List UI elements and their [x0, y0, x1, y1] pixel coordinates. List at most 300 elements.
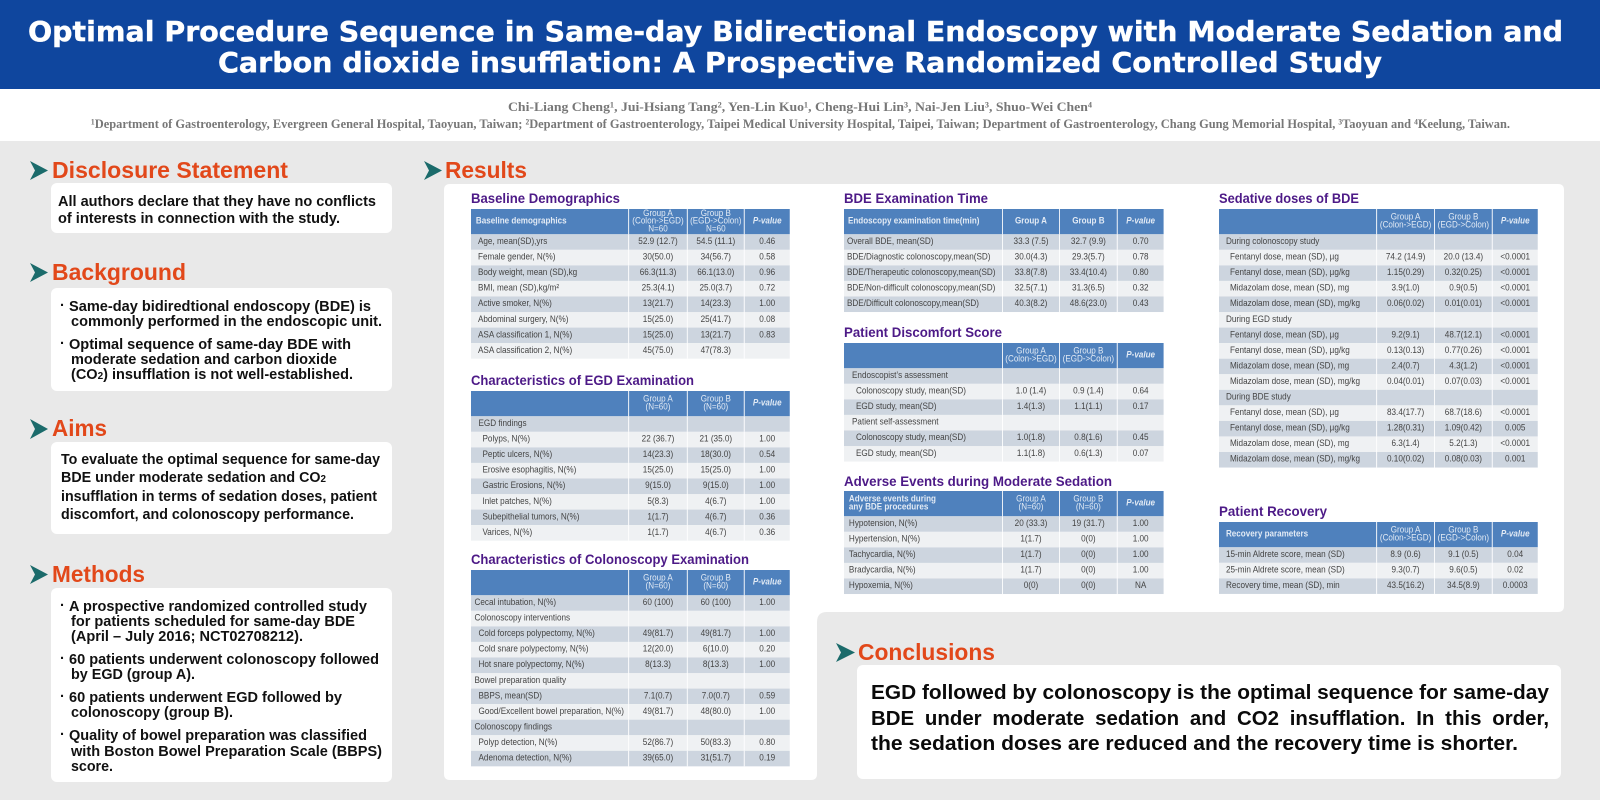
table: patient discomfort score: EGD study, mean(SD): [856, 448, 937, 459]
table: sedative doses: During colonoscopy study: [1226, 236, 1319, 247]
panel: conclusions: Conclusions: [858, 639, 995, 665]
table: baseline demographics: ASA classification 2, N(%): [478, 345, 572, 356]
table: patient discomfort score: Patient self-assessment: [852, 417, 939, 428]
table: patient discomfort score: 1.1(1.8): [1017, 448, 1045, 459]
table: EGD examination: 15(25.0): [701, 465, 731, 476]
panel: background: ·: [60, 298, 65, 314]
panel: aims: Aims: [52, 415, 107, 441]
panel: background: Background: [52, 259, 186, 285]
table: sedative doses: 0.07(0.03): [1445, 376, 1482, 387]
table: sedative doses: Fentanyl dose, mean (SD), µg/kg: [1230, 268, 1350, 278]
panel: methods: ·: [60, 651, 65, 667]
table: colonoscopy examination: 7.1(0.7): [644, 691, 672, 701]
table: colonoscopy examination: 7.0(0.7): [702, 691, 730, 701]
table: sedative doses: 0.001: [1505, 454, 1525, 465]
table: baseline demographics: Body weight, mean (SD),kg: [478, 268, 577, 278]
table: adverse events: 1.00: [1133, 550, 1149, 560]
table: adverse events: Hypotension, N(%): [849, 518, 917, 529]
table: colonoscopy examination: Cold snare polypectomy, N(%): [478, 644, 588, 655]
table: patient discomfort score: 0.8(1.6): [1074, 433, 1102, 443]
table: sedative doses: 1.28(0.31): [1387, 423, 1424, 434]
table: patient recovery: Recovery time, mean (SD), min: [1226, 581, 1340, 591]
table: BDE examination time: [844, 209, 1164, 312]
table: colonoscopy examination: 0.59: [759, 691, 775, 701]
table: baseline demographics: 0.72: [759, 283, 775, 294]
table: EGD examination: Group B: [701, 394, 731, 404]
panel: baseline demographics: [471, 190, 790, 358]
table: patient discomfort score: Group A: [1016, 346, 1046, 356]
table: colonoscopy examination: [471, 570, 790, 766]
table: sedative doses: Fentanyl dose, mean (SD), µg/kg: [1230, 345, 1350, 356]
table: adverse events: 0(0): [1081, 534, 1096, 545]
table: baseline demographics: 0.96: [759, 268, 775, 278]
table: baseline demographics: Age, mean(SD),yrs: [478, 236, 547, 247]
table: sedative doses: Fentanyl dose, mean (SD), µg: [1230, 407, 1339, 418]
table: colonoscopy examination: Colonoscopy findings: [474, 722, 552, 733]
heading: adverse events: Adverse Events during Moderate Sedation: [844, 473, 1112, 489]
table: sedative doses: <0.0001: [1500, 439, 1530, 449]
table: BDE examination time: BDE/Therapeutic colonoscopy,mean(SD): [847, 268, 995, 278]
table: sedative doses: 0.77(0.26): [1445, 345, 1482, 356]
table: baseline demographics: 14(23.3): [701, 299, 731, 309]
table: patient recovery: 0.0003: [1503, 581, 1528, 591]
table: sedative doses: 1.15(0.29): [1387, 268, 1424, 278]
panel: aims: [30, 415, 392, 534]
table: sedative doses: Midazolam dose, mean (SD), mg/kg: [1230, 376, 1360, 387]
table: patient recovery: [1219, 522, 1538, 594]
table: sedative doses: 20.0 (13.4): [1444, 252, 1483, 263]
panel: conclusions: the sedation doses are reduced and the recovery time is shorter.: [871, 733, 1518, 755]
table: adverse events: Tachycardia, N(%): [849, 550, 916, 560]
table: patient discomfort score: EGD study, mean(SD): [856, 402, 937, 412]
table: sedative doses: 3.9(1.0): [1392, 283, 1420, 294]
table: adverse events: Group A: [1016, 494, 1046, 504]
header band with title: [0, 0, 1600, 89]
table: colonoscopy examination: 0.80: [759, 737, 775, 748]
table: adverse events: Bradycardia, N(%): [849, 565, 916, 576]
panel: disclosure statement: Disclosure Statement: [52, 157, 288, 183]
table: patient discomfort score: Colonoscopy study, mean(SD): [856, 386, 966, 397]
table: colonoscopy examination: Good/Excellent bowel preparation, N(%): [478, 706, 624, 717]
table: colonoscopy examination: Adenoma detection, N(%): [478, 753, 572, 764]
table: adverse events: 0(0): [1081, 550, 1096, 560]
table: EGD examination: 1.00: [759, 496, 775, 507]
table: patient recovery: 0.02: [1507, 565, 1523, 576]
table: BDE examination time: 0.78: [1133, 252, 1149, 263]
table: adverse events: Hypoxemia, N(%): [849, 581, 913, 591]
table: sedative doses: <0.0001: [1500, 361, 1530, 372]
table: adverse events: 1.00: [1133, 565, 1149, 576]
table: colonoscopy examination: Bowel preparation quality: [474, 675, 566, 686]
table: sedative doses: 48.7(12.1): [1445, 330, 1482, 340]
table: colonoscopy examination: 39(65.0): [643, 753, 673, 764]
table: sedative doses: 4.3(1.2): [1449, 361, 1477, 372]
table: BDE examination time: 0.32: [1133, 283, 1149, 294]
table: baseline demographics: 54.5 (11.1): [696, 236, 735, 247]
table: EGD examination: 15(25.0): [643, 465, 673, 476]
table: BDE examination time: 33.8(7.8): [1015, 268, 1047, 278]
panel: characteristics of colonoscopy examination: [471, 551, 790, 766]
table: colonoscopy examination: Cecal intubation, N(%): [474, 597, 556, 608]
table: baseline demographics: N=60: [706, 224, 726, 234]
panel: characteristics of EGD examination: [471, 372, 790, 540]
table: colonoscopy examination: 60 (100): [701, 597, 731, 608]
table: adverse events: any BDE procedures: [849, 502, 928, 512]
table: sedative doses: Midazolam dose, mean (SD), mg/kg: [1230, 299, 1360, 309]
table: patient recovery: 9.1 (0.5): [1448, 549, 1479, 560]
table: EGD examination: EGD findings: [478, 418, 527, 429]
table: colonoscopy examination: 8(13.3): [645, 660, 671, 670]
panel: methods: 60 patients underwent EGD followed by: [69, 690, 342, 706]
table: EGD examination: 9(15.0): [703, 481, 729, 491]
table: adverse events: 0(0): [1024, 581, 1038, 591]
table: baseline demographics: (EGD->Colon): [690, 216, 741, 226]
table: EGD examination: 4(6.7): [705, 512, 726, 522]
table: patient discomfort score: 0.07: [1133, 448, 1149, 459]
table: sedative doses: 0.005: [1505, 423, 1525, 434]
table: EGD examination: Peptic ulcers, N(%): [482, 450, 552, 460]
table: EGD examination: Erosive esophagitis, N(%): [482, 465, 576, 476]
table: baseline demographics: 15(25.0): [643, 314, 673, 325]
table: EGD examination: 9(15.0): [645, 481, 671, 491]
table: sedative doses: [1219, 209, 1538, 468]
table: patient discomfort score: Group B: [1073, 346, 1103, 356]
table: BDE examination time: Endoscopy examination time(min): [848, 216, 979, 226]
table: baseline demographics: 66.1(13.0): [697, 268, 734, 278]
table: sedative doses: 2.4(0.7): [1392, 361, 1420, 372]
table: baseline demographics: 52.9 (12.7): [638, 236, 678, 247]
table: sedative doses: During BDE study: [1226, 392, 1291, 403]
table: sedative doses: Midazolam dose, mean (SD), mg/kg: [1230, 454, 1360, 465]
panel: methods: colonoscopy (group B).: [71, 705, 233, 721]
table: patient discomfort score: 1.1(1.1): [1074, 402, 1102, 412]
table: baseline demographics: 47(78.3): [701, 345, 731, 356]
table: EGD examination: 18(30.0): [701, 450, 731, 460]
table: BDE examination time: BDE/Diagnostic colonoscopy,mean(SD): [847, 252, 991, 263]
table: EGD examination: 0.36: [759, 527, 775, 538]
table: EGD examination: [471, 391, 790, 540]
table: colonoscopy examination: P-value: [753, 577, 782, 587]
table: BDE examination time: BDE/Non-difficult colonoscopy,mean(SD): [847, 283, 995, 294]
panel: conclusions: [836, 639, 1561, 779]
table: colonoscopy examination: Hot snare polypectomy, N(%): [478, 660, 584, 670]
table: patient recovery: 15-min Aldrete score, mean (SD): [1226, 549, 1345, 560]
panel: background: (CO2) insufflation is not well-established.: [71, 367, 353, 383]
table: sedative doses: 6.3(1.4): [1392, 439, 1420, 449]
table: baseline demographics: 0.46: [759, 236, 775, 247]
table: EGD examination: Gastric Erosions, N(%): [482, 481, 565, 491]
table: colonoscopy examination: 0.20: [759, 644, 775, 655]
table: colonoscopy examination: 49(81.7): [643, 629, 673, 639]
panel: aims: BDE under moderate sedation and CO2: [61, 470, 326, 486]
table: sedative doses: <0.0001: [1500, 407, 1530, 418]
panel: adverse events during moderate sedation: [844, 473, 1164, 594]
table: baseline demographics: 25.3(4.1): [642, 283, 674, 294]
table: baseline demographics: 13(21.7): [643, 299, 673, 309]
panel: background: [30, 259, 392, 391]
panel: patient discomfort score: [844, 324, 1164, 462]
table: sedative doses: 0.04(0.01): [1387, 376, 1424, 387]
table: patient recovery: Recovery parameters: [1226, 529, 1308, 539]
table: BDE examination time: P-value: [1126, 216, 1155, 226]
table: BDE examination time: 40.3(8.2): [1015, 299, 1047, 309]
table: patient recovery: 8.9 (0.6): [1390, 549, 1421, 560]
panel: methods: ·: [60, 689, 65, 705]
table: baseline demographics: (Colon->EGD): [632, 216, 684, 226]
panel: conclusions: EGD followed by colonoscopy is the optimal sequence for same-day: [871, 682, 1550, 704]
table: colonoscopy examination: 49(81.7): [701, 629, 731, 639]
table: colonoscopy examination: 0.19: [759, 753, 775, 764]
table: BDE examination time: 0.70: [1133, 236, 1149, 247]
table: patient discomfort score: Colonoscopy study, mean(SD): [856, 433, 966, 443]
table: sedative doses: Group A: [1391, 212, 1420, 222]
table: baseline demographics: 45(75.0): [643, 345, 673, 356]
panel: methods: Quality of bowel preparation was classified: [69, 728, 367, 744]
table: baseline demographics: 66.3(11.3): [640, 268, 676, 278]
table: colonoscopy examination: 6(10.0): [703, 644, 729, 655]
table: sedative doses: Fentanyl dose, mean (SD), µg: [1230, 252, 1339, 263]
table: patient discomfort score: 0.45: [1133, 433, 1149, 443]
table: baseline demographics: N=60: [648, 224, 668, 234]
table: patient discomfort score: (EGD->Colon): [1063, 354, 1114, 364]
table: adverse events: 20 (33.3): [1015, 518, 1047, 529]
table: BDE examination time: 32.7 (9.9): [1071, 236, 1106, 247]
panel: methods: [30, 561, 392, 782]
table: patient discomfort score: 1.0 (1.4): [1016, 386, 1046, 397]
panel: background: moderate sedation and carbon dioxide: [71, 352, 337, 368]
table: sedative doses: 68.7(18.6): [1445, 407, 1482, 418]
table: BDE examination time: BDE/Difficult colonoscopy,mean(SD): [847, 299, 979, 309]
table: colonoscopy examination: (N=60): [646, 581, 670, 591]
table: EGD examination: 22 (36.7): [642, 434, 674, 445]
table: colonoscopy examination: 50(83.3): [701, 737, 731, 748]
table: baseline demographics: Female gender, N(%): [478, 252, 555, 263]
table: EGD examination: Subepithelial tumors, N(%): [482, 512, 579, 522]
table: EGD examination: (N=60): [703, 402, 728, 412]
table: sedative doses: <0.0001: [1500, 252, 1530, 263]
table: colonoscopy examination: (N=60): [703, 581, 728, 591]
table: EGD examination: 1(1.7): [647, 512, 669, 522]
table: sedative doses: During EGD study: [1226, 314, 1292, 325]
authors and affiliations band: [0, 89, 1600, 141]
table: sedative doses: <0.0001: [1500, 283, 1530, 294]
table: sedative doses: Midazolam dose, mean (SD), mg: [1230, 361, 1349, 372]
panel: methods: 60 patients underwent colonoscopy followed: [69, 652, 379, 668]
table: EGD examination: Inlet patches, N(%): [482, 496, 552, 507]
panel: methods: ·: [60, 598, 65, 614]
table: patient recovery: 0.04: [1507, 549, 1523, 560]
table: sedative doses: 0.08(0.03): [1445, 454, 1482, 465]
table: sedative doses: <0.0001: [1500, 376, 1530, 387]
table: sedative doses: Fentanyl dose, mean (SD), µg: [1230, 330, 1339, 340]
panel: BDE examination time: [844, 190, 1164, 312]
table: patient discomfort score: 0.6(1.3): [1074, 448, 1102, 459]
table: baseline demographics: 30(50.0): [643, 252, 673, 263]
table: sedative doses: P-value: [1501, 216, 1530, 226]
table: sedative doses: <0.0001: [1500, 268, 1530, 278]
table: baseline demographics: Baseline demographics: [476, 216, 567, 226]
table: adverse events: NA: [1135, 581, 1146, 591]
table: BDE examination time: 31.3(6.5): [1072, 283, 1105, 294]
table: BDE examination time: 0.80: [1133, 268, 1149, 278]
table: BDE examination time: 48.6(23.0): [1070, 299, 1107, 309]
table: sedative doses: 0.06(0.02): [1387, 299, 1424, 309]
table: baseline demographics: 25(41.7): [701, 314, 731, 325]
table: patient discomfort score: [844, 343, 1164, 462]
table: patient discomfort score: 0.64: [1133, 386, 1149, 397]
table: EGD examination: 1.00: [759, 481, 775, 491]
table: colonoscopy examination: 1.00: [759, 597, 775, 608]
table: patient recovery: 43.5(16.2): [1387, 581, 1424, 591]
table: adverse events: [844, 491, 1164, 594]
heading: BDE examination time: BDE Examination Time: [844, 190, 988, 206]
table: patient recovery: 34.5(8.9): [1447, 581, 1480, 591]
panel: background: Same-day bidiredtional endoscopy (BDE) is: [69, 299, 371, 315]
table: adverse events: Adverse events during: [849, 494, 936, 504]
table: BDE examination time: 33.4(10.4): [1070, 268, 1107, 278]
panel: methods: score.: [71, 759, 113, 775]
table: EGD examination: 14(23.3): [643, 450, 673, 460]
table: EGD examination: 1.00: [759, 465, 775, 476]
table: BDE examination time: Group B: [1072, 216, 1105, 226]
table: EGD examination: (N=60): [646, 402, 670, 412]
table: patient recovery: Group B: [1448, 525, 1478, 535]
table: patient discomfort score: (Colon->EGD): [1005, 354, 1057, 364]
authors and affiliations band: ¹Department of Gastroenterology, Evergreen General Hospital, Taoyuan, Taiwan; ²Department of Gastroenterology, Taipei Medical University Hospital, Taipei, Taiwan; Department of Gastroenterology, Chang Gung Memorial Hospital, ³Taoyuan and ⁴Keelung, Taiwan.: [91, 116, 1510, 131]
panel: conclusions: BDE under moderate sedation and CO2 insufflation. In this order,: [871, 708, 1549, 730]
table: baseline demographics: 15(25.0): [643, 330, 673, 340]
table: baseline demographics: ASA classification 1, N(%): [478, 330, 572, 340]
table: sedative doses: 74.2 (14.9): [1386, 252, 1425, 263]
table: colonoscopy examination: Cold forceps polypectomy, N(%): [478, 629, 595, 639]
table: colonoscopy examination: Colonoscopy interventions: [474, 613, 570, 624]
heading: patient recovery: Patient Recovery: [1219, 503, 1327, 519]
panel: aims: insufflation in terms of sedation doses, patient: [61, 489, 377, 505]
table: adverse events: Hypertension, N(%): [849, 534, 920, 545]
table: colonoscopy examination: 52(86.7): [643, 737, 673, 748]
table: baseline demographics: 0.08: [759, 314, 775, 325]
panel: background: commonly performed in the endoscopic unit.: [71, 314, 382, 330]
table: sedative doses: (Colon->EGD): [1380, 220, 1431, 230]
table: patient recovery: 9.3(0.7): [1392, 565, 1420, 576]
panel: methods: by EGD (group A).: [71, 667, 195, 683]
panel: aims: discomfort, and colonoscopy performance.: [61, 507, 354, 523]
table: baseline demographics: 0.58: [759, 252, 775, 263]
table: colonoscopy examination: 8(13.3): [703, 660, 729, 670]
table: sedative doses: Fentanyl dose, mean (SD), µg/kg: [1230, 423, 1350, 434]
table: EGD examination: P-value: [753, 398, 782, 408]
table: adverse events: 1(1.7): [1020, 534, 1042, 545]
header band with title: Optimal Procedure Sequence in Same-day Bidirectional Endoscopy with Moderate Sedation and: [28, 15, 1563, 48]
table: sedative doses: Midazolam dose, mean (SD), mg: [1230, 439, 1349, 449]
table: colonoscopy examination: BBPS, mean(SD): [478, 691, 542, 701]
table: sedative doses: <0.0001: [1500, 299, 1530, 309]
table: sedative doses: 0.13(0.13): [1387, 345, 1424, 356]
table: colonoscopy examination: Group B: [701, 573, 731, 583]
panel: background: ·: [60, 336, 65, 352]
table: sedative doses: 0.32(0.25): [1445, 268, 1482, 278]
table: BDE examination time: 0.43: [1133, 299, 1149, 309]
panel: methods: for patients scheduled for same-day BDE: [71, 614, 355, 630]
table: EGD examination: Polyps, N(%): [482, 434, 530, 445]
table: baseline demographics: 34(56.7): [701, 252, 731, 263]
table: adverse events: (N=60): [1076, 502, 1101, 512]
table: EGD examination: 5(8.3): [647, 496, 669, 507]
panel: background: Optimal sequence of same-day BDE with: [69, 337, 351, 353]
table: EGD examination: 0.36: [759, 512, 775, 522]
table: adverse events: 1.00: [1133, 534, 1149, 545]
table: patient discomfort score: P-value: [1126, 350, 1155, 360]
panel: aims: To evaluate the optimal sequence for same-day: [61, 452, 380, 468]
table: colonoscopy examination: 1.00: [759, 629, 775, 639]
table: BDE examination time: 29.3(5.7): [1072, 252, 1105, 263]
table: patient recovery: 25-min Aldrete score, mean (SD): [1226, 565, 1345, 576]
panel: sedative doses of BDE: [1219, 190, 1538, 468]
panel: methods: ·: [60, 727, 65, 743]
table: EGD examination: 4(6.7): [705, 527, 726, 538]
panel: methods: (April – July 2016; NCT02708212).: [71, 629, 303, 645]
panel: disclosure statement: of interests in connection with the study.: [58, 211, 340, 227]
table: EGD examination: 4(6.7): [705, 496, 726, 507]
table: adverse events: Group B: [1073, 494, 1103, 504]
table: sedative doses: 0.9(0.5): [1449, 283, 1477, 294]
table: adverse events: 19 (31.7): [1072, 518, 1105, 529]
table: colonoscopy examination: 1.00: [759, 706, 775, 717]
table: adverse events: 0(0): [1081, 581, 1096, 591]
table: adverse events: 1(1.7): [1020, 565, 1042, 576]
table: sedative doses: 83.4(17.7): [1387, 407, 1424, 418]
table: patient discomfort score: 1.4(1.3): [1017, 402, 1045, 412]
panel: disclosure statement: [30, 157, 392, 233]
table: adverse events: (N=60): [1019, 502, 1043, 512]
panel: results background: Results: [445, 157, 527, 183]
table: baseline demographics: 1.00: [759, 299, 775, 309]
heading: characteristics of colonoscopy examination: Characteristics of Colonoscopy Examination: [471, 551, 749, 567]
table: BDE examination time: 33.3 (7.5): [1014, 236, 1048, 247]
table: colonoscopy examination: 12(20.0): [643, 644, 673, 655]
table: EGD examination: 1.00: [759, 434, 775, 445]
panel: methods: Methods: [52, 561, 145, 587]
table: colonoscopy examination: 60 (100): [643, 597, 673, 608]
table: colonoscopy examination: 1.00: [759, 660, 775, 670]
table: patient recovery: (EGD->Colon): [1438, 533, 1489, 543]
table: patient discomfort score: 1.0(1.8): [1017, 433, 1045, 443]
table: baseline demographics: [471, 209, 790, 358]
panel: disclosure statement: All authors declare that they have no conflicts: [58, 194, 376, 210]
table: BDE examination time: Overall BDE, mean(SD): [847, 236, 934, 247]
panel: methods: A prospective randomized controlled study: [69, 599, 367, 615]
panel: results background: [424, 157, 1564, 780]
table: EGD examination: Group A: [643, 394, 673, 404]
table: sedative doses: 0.10(0.02): [1387, 454, 1424, 465]
table: adverse events: P-value: [1126, 498, 1155, 508]
table: BDE examination time: Group A: [1015, 216, 1047, 226]
table: patient discomfort score: 0.17: [1133, 402, 1149, 412]
table: sedative doses: 0.01(0.01): [1445, 299, 1482, 309]
table: patient recovery: P-value: [1501, 529, 1530, 539]
header band with title: Carbon dioxide insufflation: A Prospective Randomized Controlled Study: [218, 46, 1382, 79]
table: patient discomfort score: 0.9 (1.4): [1073, 386, 1104, 397]
heading: sedative doses of BDE: Sedative doses of BDE: [1219, 190, 1359, 206]
table: sedative doses: <0.0001: [1500, 330, 1530, 340]
panel: patient recovery: [1219, 503, 1538, 594]
heading: patient discomfort score: Patient Discomfort Score: [844, 324, 1002, 340]
table: baseline demographics: BMI, mean (SD),kg/m²: [478, 283, 559, 294]
table: baseline demographics: 13(21.7): [701, 330, 731, 340]
table: baseline demographics: P-value: [753, 216, 782, 226]
table: adverse events: 1.00: [1133, 518, 1149, 529]
table: sedative doses: Group B: [1448, 212, 1478, 222]
